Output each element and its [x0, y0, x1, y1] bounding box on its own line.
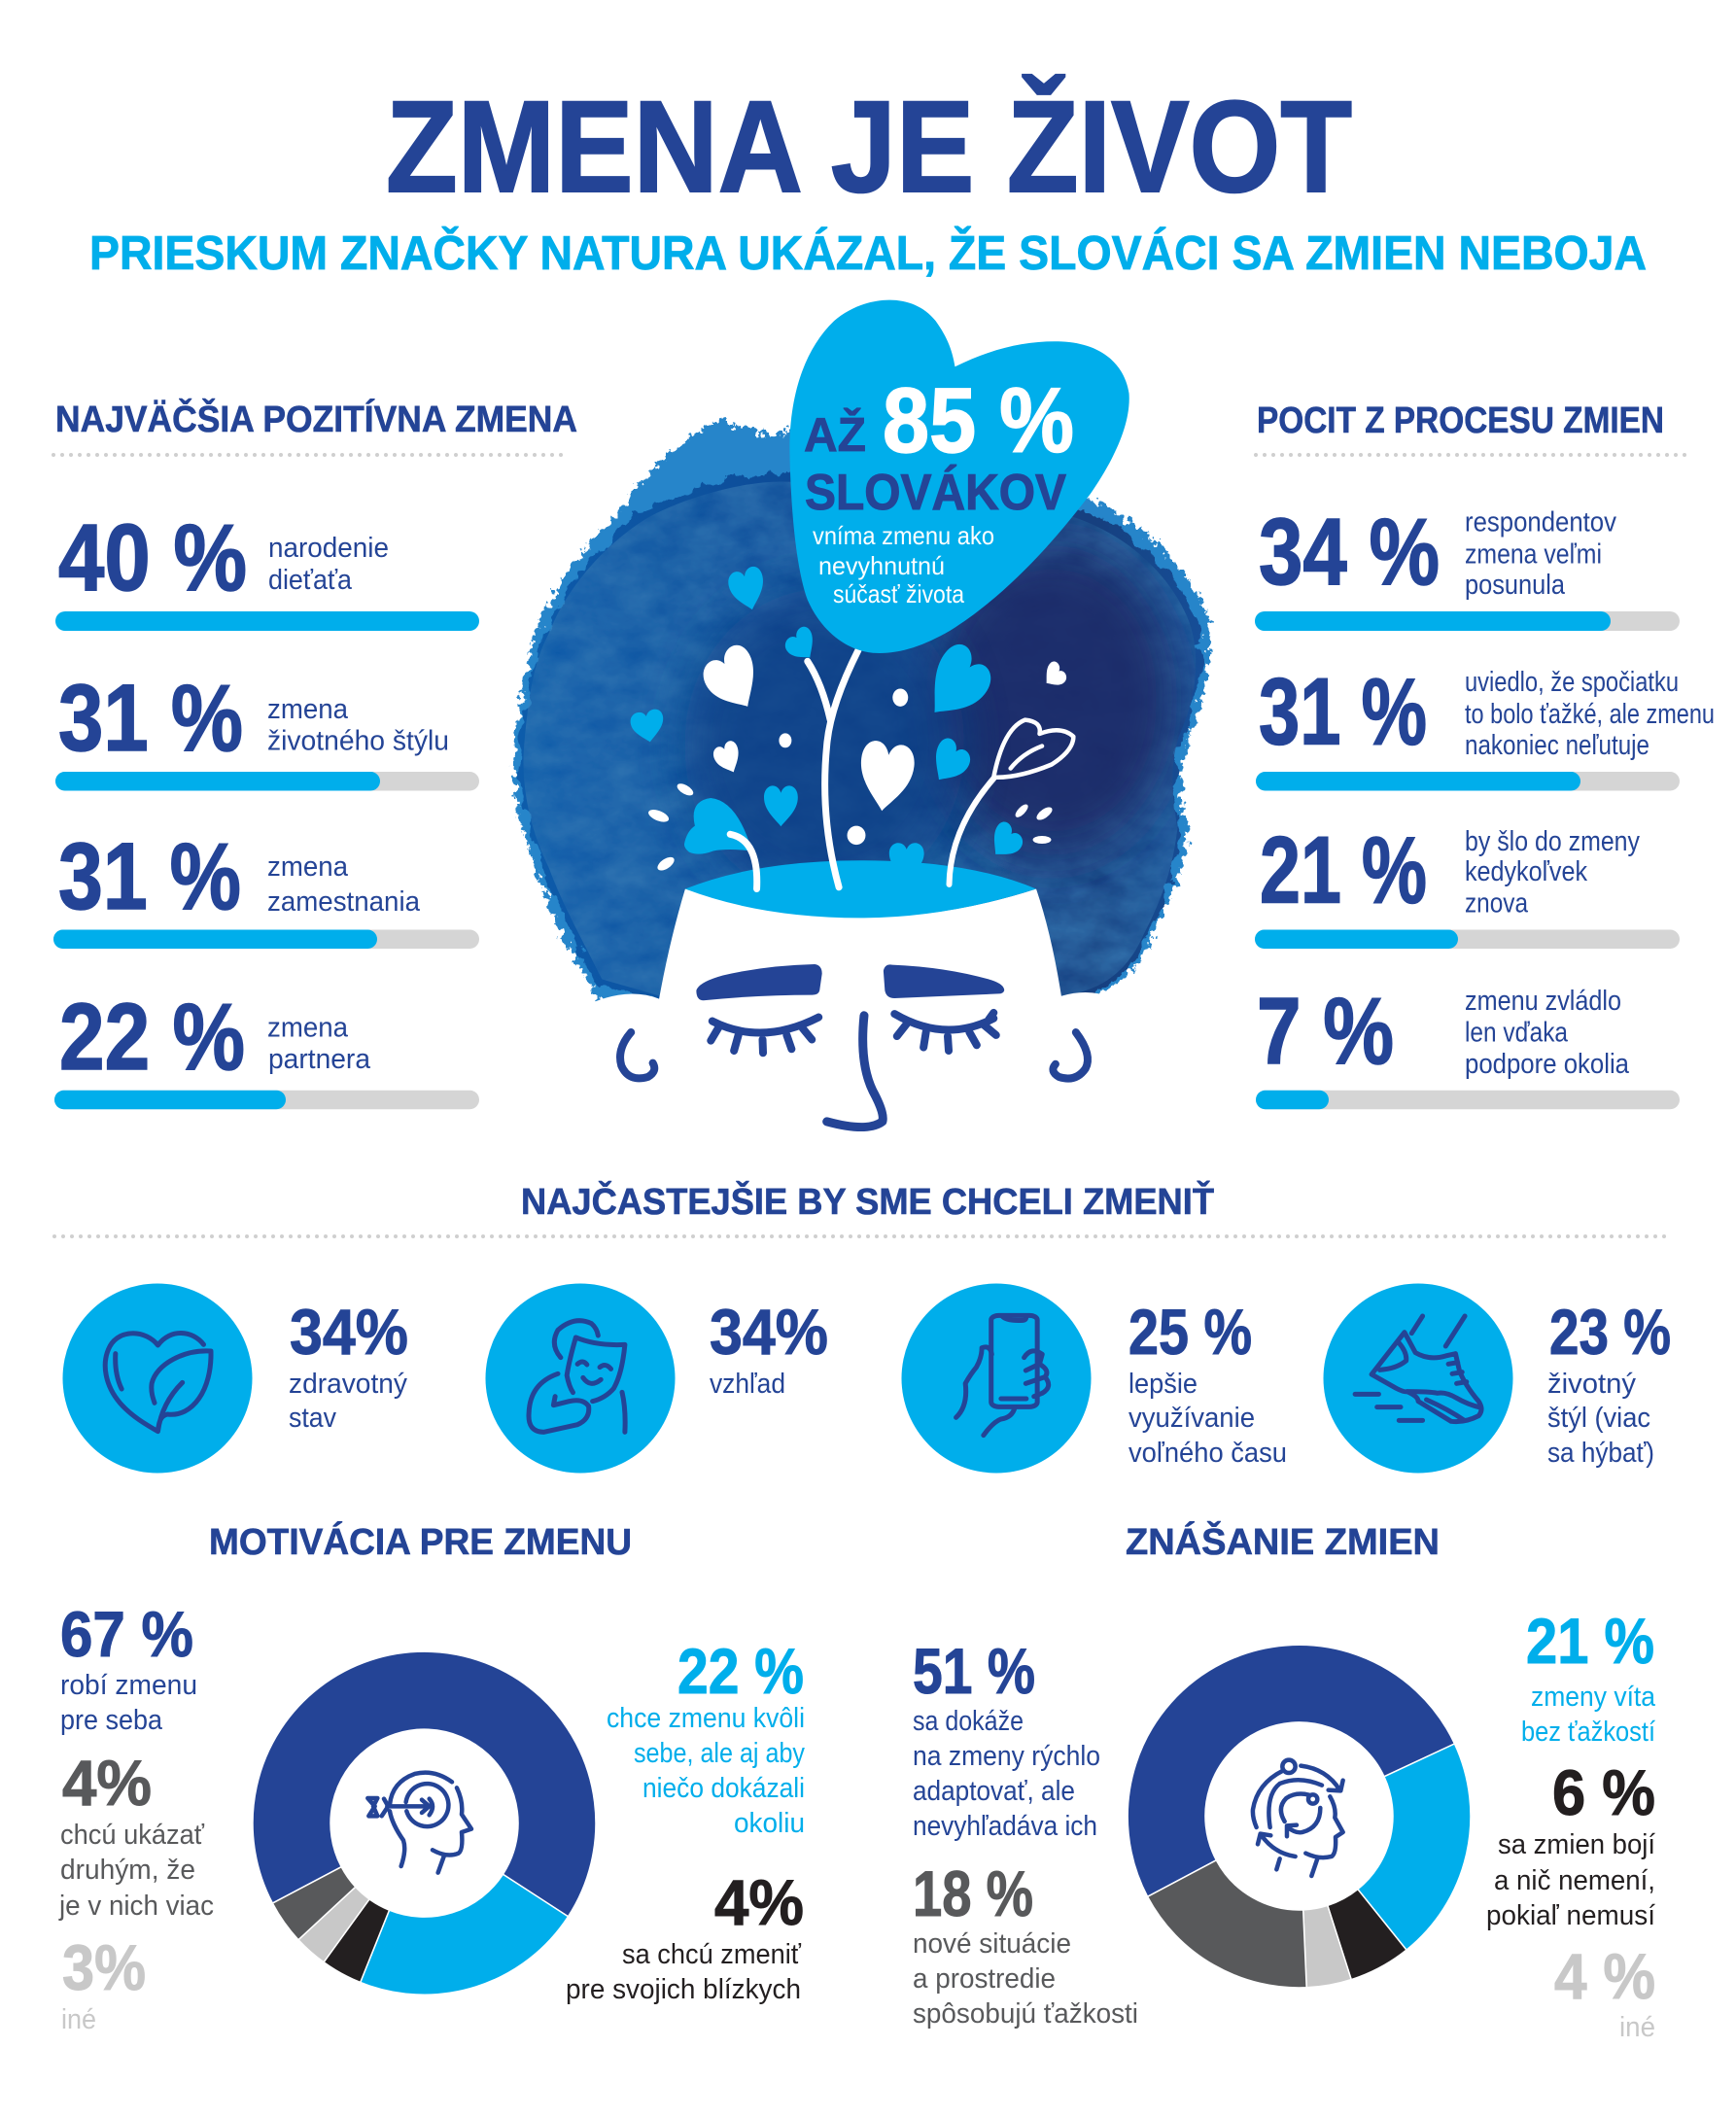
subtitle: PRIESKUM ZNAČKY NATURA UKÁZAL, ŽE SLOVÁCI SA ZMIEN NEBOJA — [89, 226, 1647, 280]
hearts and dots — [629, 565, 1068, 873]
nose — [827, 1016, 883, 1128]
stat: 18 %: 18 % — [913, 1857, 1033, 1929]
stat: 18 %: a prostredie — [913, 1963, 1056, 1995]
stat: 18 %: nové situácie — [913, 1928, 1071, 1960]
icon: cyan heart behind surface — [889, 843, 924, 880]
stat: 6 %: 6 % — [1552, 1756, 1655, 1828]
row: 21 % — [1255, 817, 1680, 949]
watercolor hair — [514, 419, 1209, 999]
callout: 85 %: súčasť života — [833, 579, 964, 608]
stat: 6 % — [1486, 1756, 1655, 1931]
row: 22 % — [54, 984, 479, 1109]
item: životný štýl — [1324, 1283, 1671, 1474]
row: 34 % — [1255, 499, 1680, 631]
item: zdravotný stav: stav — [289, 1403, 336, 1434]
row: 21 %: 21 % — [1260, 817, 1427, 923]
stat: 4 % blízki: pre svojich blízkych — [566, 1974, 801, 2005]
item: vzhľad: vzhľad — [710, 1369, 785, 1400]
stat: 22 %: sebe, ale aj aby — [634, 1738, 805, 1769]
stat: 22 %: niečo dokázali — [642, 1773, 805, 1804]
open head surface — [685, 860, 1036, 918]
callout: 85 %: nevyhnutnú — [818, 551, 945, 580]
stat: 18 %: spôsobujú ťažkosti — [913, 1998, 1138, 2030]
title: ZMENA JE ŽIVOT — [386, 75, 1352, 220]
row: 31 %: zamestnania — [267, 886, 421, 918]
row: 21 %: by šlo do zmeny — [1465, 826, 1640, 857]
stat: 67 %: 67 % — [60, 1598, 193, 1670]
stat: 3 % iné: 3% — [62, 1931, 146, 2003]
stat: 22 % — [607, 1635, 805, 1839]
panel: najväčšia pozitívna zmena — [53, 397, 577, 1109]
heading: ZNÁŠANIE ZMIEN — [1126, 1519, 1440, 1563]
panel: najčastejšie by sme chceli zmeniť — [54, 1179, 1671, 1474]
panel: pocit z procesu zmien — [1255, 400, 1715, 1109]
stat: 6 %: sa zmien bojí — [1498, 1829, 1655, 1860]
stat: 21 %: zmeny víta — [1531, 1682, 1656, 1713]
stat: 4 % ukázať: druhým, že — [60, 1855, 195, 1886]
row: 7 %: len vďaka — [1465, 1017, 1569, 1048]
stat: 4 % ukázať: je v nich viac — [58, 1891, 214, 1922]
item: zdravotný stav: zdravotný — [289, 1369, 407, 1400]
stat: 4 % ukázať — [58, 1747, 214, 1922]
row: 31 %: zmena — [267, 694, 349, 725]
stat: 4 % ukázať: chcú ukázať — [60, 1820, 205, 1851]
row: 31 %: zmena — [267, 851, 349, 883]
stat: 3 % iné: iné — [61, 2004, 96, 2035]
stat: 51 %: na zmeny rýchlo — [913, 1741, 1100, 1772]
stat: 4 % iné — [1554, 1940, 1655, 2043]
callout: 85 %: 85 % — [883, 369, 1074, 472]
item: voľný čas: 25 % — [1128, 1296, 1252, 1368]
stat: 18 % — [913, 1857, 1138, 2030]
item: životný štýl: životný — [1547, 1369, 1636, 1400]
callout: 85 %: vníma zmenu ako — [813, 521, 994, 550]
icon: running shoe — [1355, 1316, 1481, 1422]
heading: MOTIVÁCIA PRE ZMENU — [209, 1520, 632, 1563]
row: 31 % — [55, 665, 479, 791]
item: voľný čas: využívanie — [1128, 1403, 1255, 1434]
row: 7 %: podpore okolia — [1465, 1049, 1630, 1080]
item: životný štýl: sa hýbať) — [1547, 1438, 1654, 1469]
row: 31 % — [53, 823, 479, 949]
panel: znášanie zmien — [913, 1519, 1656, 2043]
row: 34 %: posunula — [1465, 570, 1566, 601]
item: vzhľad: 34% — [710, 1296, 828, 1368]
icon: heart with leaf — [105, 1334, 211, 1432]
stat: 67 % — [60, 1598, 197, 1736]
panel: motivácia pre zmenu — [58, 1520, 805, 2035]
row: 34 %: zmena veľmi — [1465, 538, 1602, 570]
stat: 4 % blízki: 4% — [714, 1866, 804, 1938]
stat: 4 % iné: 4 % — [1554, 1940, 1655, 2012]
stat: 3 % iné — [61, 1931, 146, 2035]
item: vzhľad — [486, 1283, 828, 1474]
row: 40 % — [55, 504, 479, 631]
item: voľný čas — [902, 1283, 1287, 1474]
row: 7 %: 7 % — [1257, 978, 1394, 1084]
row: 31 %: 31 % — [58, 823, 241, 929]
item: životný štýl: 23 % — [1549, 1296, 1671, 1368]
heading: NAJČASTEJŠIE BY SME CHCELI ZMENIŤ — [521, 1179, 1214, 1223]
row: 22 %: partnera — [268, 1044, 371, 1075]
callout: 85 % — [804, 369, 1074, 608]
callout: 85 %: AŽ — [804, 408, 866, 462]
icon: phone in hand — [956, 1315, 1049, 1436]
stat: 4 % iné: iné — [1619, 2012, 1655, 2043]
closed eyes — [711, 1013, 996, 1053]
heading: POCIT Z PROCESU ZMIEN — [1257, 400, 1664, 441]
stat: 51 % — [913, 1635, 1100, 1842]
item: voľný čas: voľného času — [1128, 1438, 1287, 1469]
row: 31 %: uviedlo, že spočiatku — [1465, 667, 1679, 698]
heading: NAJVÄČŠIA POZITÍVNA ZMENA — [55, 397, 577, 440]
stat: 4 % ukázať: 4% — [62, 1747, 152, 1819]
row: 22 %: zmena — [267, 1013, 349, 1044]
stat: 21 %: 21 % — [1526, 1605, 1654, 1677]
donut chart — [253, 1651, 596, 1995]
item: zdravotný stav — [62, 1283, 408, 1474]
stat: 21 %: bez ťažkostí — [1521, 1717, 1655, 1748]
stat: 6 %: a nič nemení, — [1494, 1865, 1655, 1896]
stat: 4 % blízki: sa chcú zmeniť — [622, 1939, 802, 1970]
icon: head with cycle arrows — [1253, 1760, 1343, 1876]
row: 40 %: dieťaťa — [268, 565, 353, 596]
row: 31 %: životného štýlu — [267, 725, 449, 756]
stat: 21 % — [1521, 1605, 1656, 1748]
row: 22 %: 22 % — [59, 984, 245, 1090]
speech bubble shape — [789, 300, 1129, 653]
stat: 51 %: sa dokáže — [913, 1706, 1024, 1737]
row: 40 %: narodenie — [268, 533, 389, 564]
stat: 22 %: chce zmenu kvôli — [607, 1703, 805, 1734]
stat: 51 %: nevyhľadáva ich — [913, 1811, 1097, 1842]
stat: 22 %: 22 % — [677, 1635, 804, 1707]
row: 31 % — [1256, 659, 1715, 791]
stat: 4 % blízki — [566, 1866, 804, 2005]
row: 34 %: respondentov — [1465, 507, 1616, 538]
row: 31 %: 31 % — [1259, 659, 1427, 765]
icon: mask — [529, 1321, 625, 1432]
stat: 51 %: adaptovať, ale — [913, 1776, 1075, 1807]
stat: 6 %: pokiaľ nemusí — [1486, 1900, 1655, 1931]
face — [590, 889, 1120, 1158]
stat: 67 %: robí zmenu — [60, 1670, 197, 1701]
panel: central illustration — [514, 300, 1209, 1158]
item: zdravotný stav: 34% — [290, 1296, 408, 1368]
stems — [730, 650, 1073, 889]
row: 31 %: nakoniec neľutuje — [1465, 730, 1649, 761]
item: voľný čas: lepšie — [1128, 1369, 1198, 1400]
row: 21 %: kedykoľvek — [1465, 856, 1587, 887]
ears — [620, 1032, 1088, 1079]
row: 31 %: 31 % — [58, 665, 243, 771]
row: 7 %: zmenu zvládlo — [1465, 986, 1621, 1017]
donut chart — [1128, 1645, 1471, 1988]
row: 21 %: znova — [1465, 888, 1529, 920]
stat: 67 %: pre seba — [60, 1705, 163, 1736]
icon: head with target — [367, 1773, 471, 1873]
eyebrows — [696, 964, 1004, 1000]
row: 7 % — [1256, 978, 1680, 1109]
item: životný štýl: štýl (viac — [1547, 1403, 1650, 1434]
row: 34 %: 34 % — [1259, 499, 1440, 605]
stat: 22 %: okoliu — [734, 1808, 805, 1839]
stat: 51 %: 51 % — [913, 1635, 1035, 1707]
row: 40 %: 40 % — [58, 504, 247, 610]
callout: 85 %: SLOVÁKOV — [805, 465, 1066, 521]
